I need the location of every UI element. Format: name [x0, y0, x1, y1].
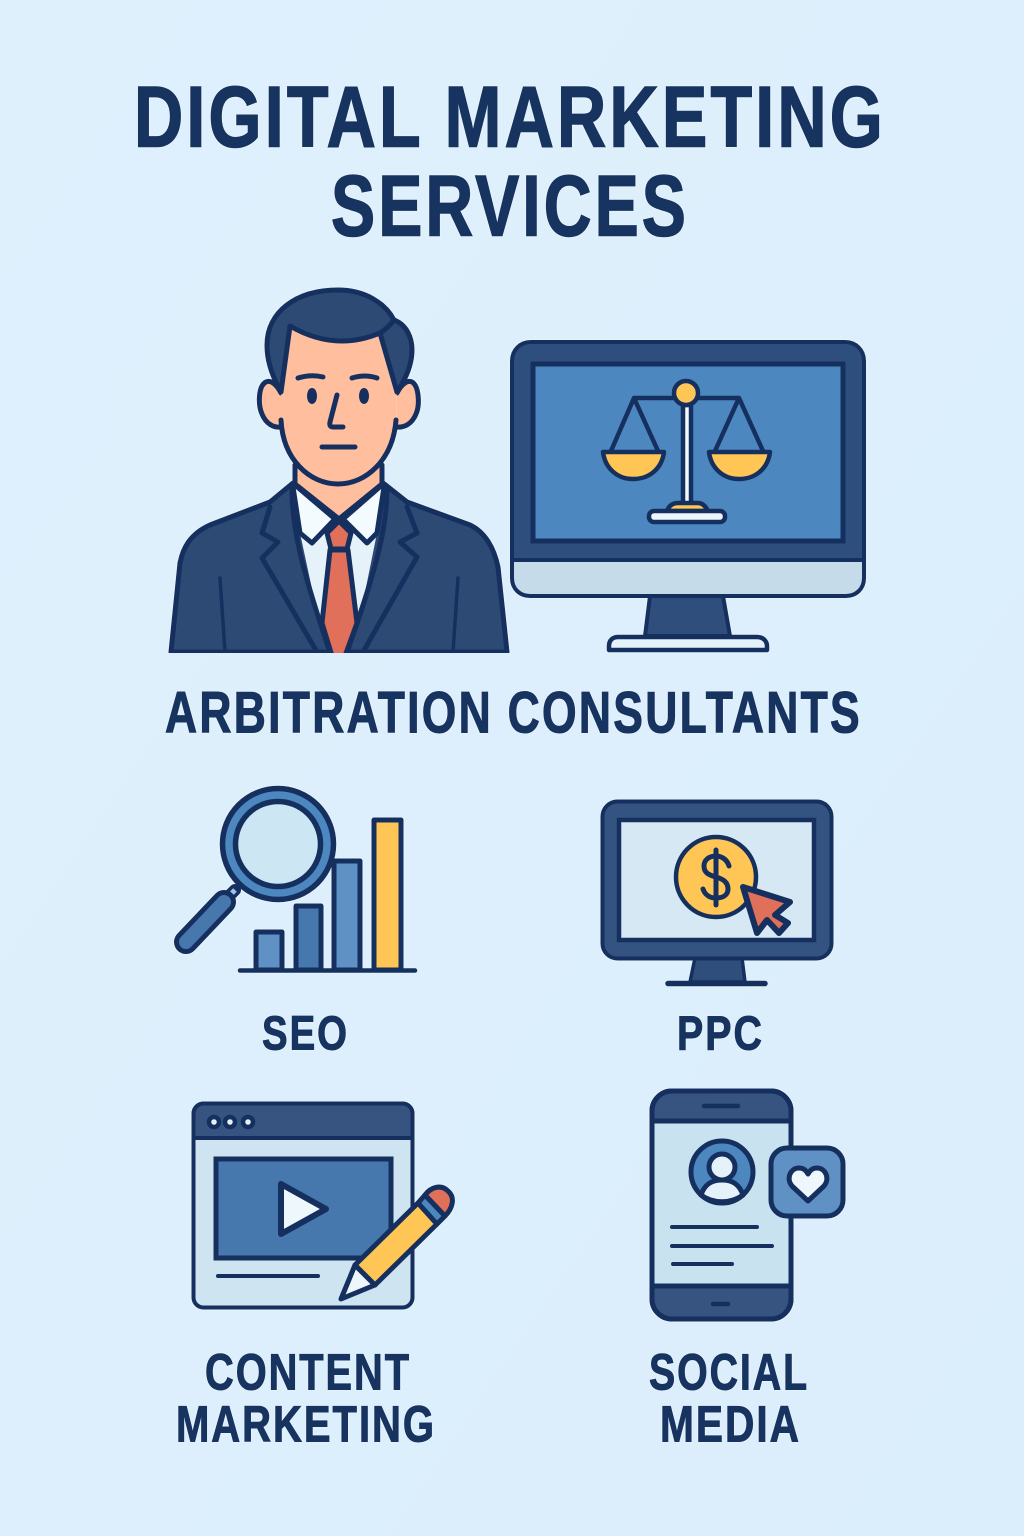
browser window — [194, 1104, 412, 1308]
neck — [295, 465, 382, 519]
title: SERVICES — [331, 158, 689, 254]
PPC stand — [690, 958, 745, 982]
magnifier lens — [222, 788, 334, 900]
caption line — [218, 1274, 318, 1278]
left ear — [259, 381, 281, 427]
right ear — [396, 381, 418, 427]
profile text lines — [672, 1227, 772, 1264]
play button — [281, 1184, 326, 1234]
phone top bar — [652, 1091, 791, 1121]
phone body — [652, 1091, 791, 1319]
facial features — [298, 376, 377, 447]
face — [281, 330, 397, 468]
title — [134, 70, 886, 254]
icon: desktop monitor with scales of justice — [512, 342, 864, 650]
phone speaker and home button — [704, 1106, 738, 1304]
dollar coin — [676, 837, 756, 917]
monitor bezel — [512, 342, 864, 560]
PPC bezel — [602, 802, 832, 958]
scale pivot — [674, 381, 698, 405]
monitor stand — [645, 596, 730, 636]
label: PPC: PPC — [677, 1008, 764, 1060]
icon: consultant in suit — [171, 290, 507, 656]
label: social media — [649, 1344, 809, 1452]
right pan — [709, 452, 770, 479]
icon: social media phone — [652, 1091, 843, 1319]
scale foot — [667, 503, 708, 511]
label: social media: SOCIAL — [649, 1344, 809, 1400]
monitor screen — [533, 364, 843, 541]
scale pole — [683, 405, 691, 505]
window control dots — [209, 1117, 253, 1127]
magnifier handle — [186, 890, 235, 942]
bar chart — [256, 820, 401, 970]
shirt collar — [293, 485, 384, 543]
monitor chin — [512, 560, 864, 596]
label: social media: MEDIA — [660, 1396, 801, 1452]
phone bottom bar — [652, 1286, 791, 1319]
monitor base — [609, 637, 767, 650]
heart badge — [771, 1148, 843, 1216]
profile avatar — [691, 1141, 753, 1203]
scales of justice — [603, 381, 770, 522]
label: content marketing: CONTENT — [205, 1344, 411, 1400]
left pan — [603, 452, 664, 479]
label: content marketing — [176, 1344, 436, 1452]
label: SEO: SEO — [262, 1008, 349, 1060]
label: content marketing: MARKETING — [176, 1396, 436, 1452]
icon: SEO magnifier and bar chart — [186, 788, 415, 970]
icon: content marketing window with pencil — [194, 1104, 452, 1308]
pencil — [341, 1187, 452, 1299]
hair — [267, 290, 412, 392]
suit jacket — [171, 483, 507, 652]
shirt — [300, 533, 376, 616]
lapel lines — [220, 490, 458, 652]
icon: PPC monitor — [602, 802, 832, 984]
necktie — [322, 521, 357, 656]
scale beam and strings — [611, 398, 763, 451]
cursor arrow — [743, 887, 790, 933]
chart baseline — [240, 968, 415, 973]
video panel — [216, 1159, 391, 1258]
browser title bar — [194, 1104, 412, 1138]
PPC screen — [619, 820, 814, 940]
